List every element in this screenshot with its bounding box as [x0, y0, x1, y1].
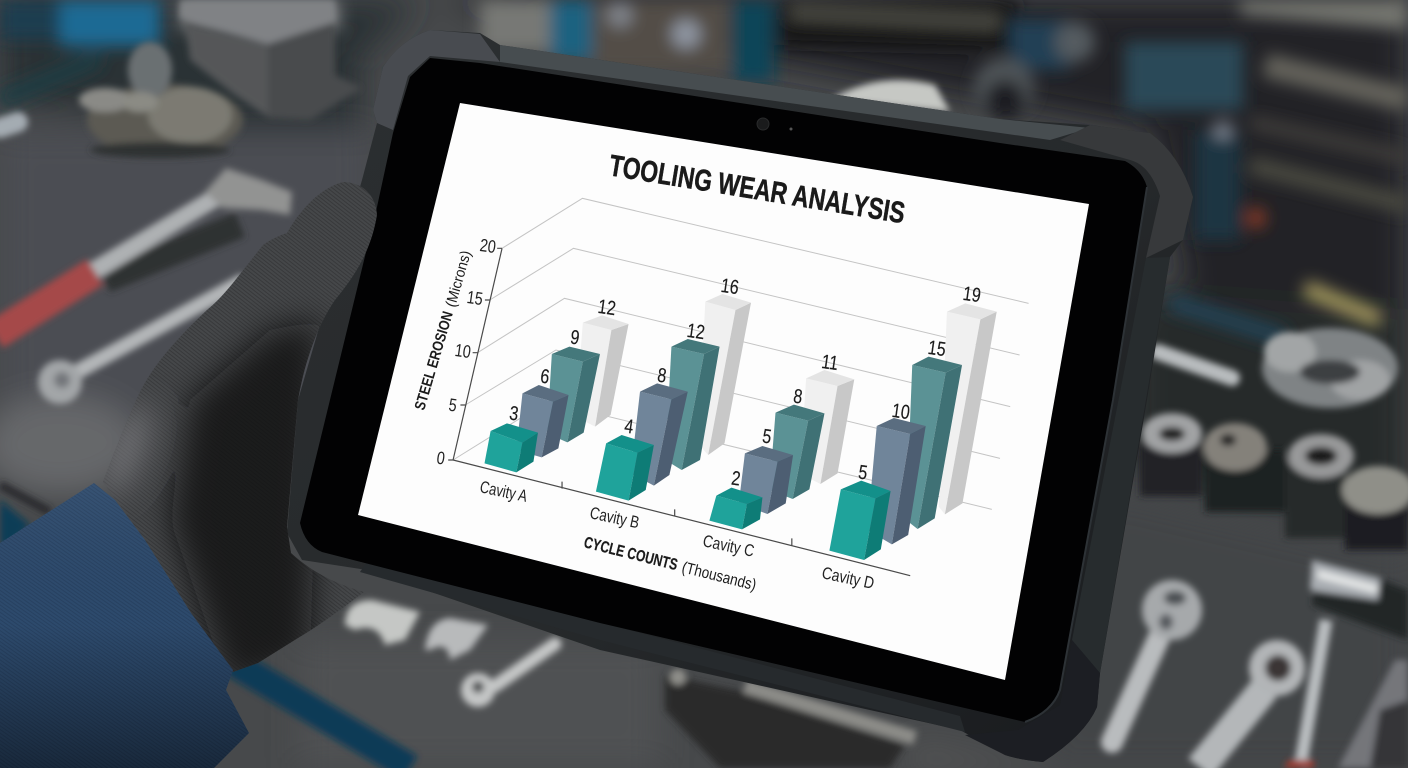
value labels: 6 [539, 365, 551, 388]
value labels: 10 [891, 399, 911, 424]
value labels: 15 [927, 336, 947, 361]
x axis category labels: Cavity A [478, 477, 530, 506]
x axis title [582, 534, 758, 594]
x axis category labels: Cavity B [588, 503, 641, 532]
y axis tick labels: 20 [478, 236, 497, 257]
tablet: rugged case [287, 30, 1193, 762]
value labels: 11 [820, 350, 840, 375]
gloved hand holding tablet [0, 170, 390, 768]
camera [757, 118, 792, 130]
y axis tick labels: 15 [465, 288, 484, 309]
corner bumper bottom right [965, 640, 1100, 762]
bars: Cavity C [709, 370, 854, 529]
value labels: 2 [730, 467, 742, 490]
y axis title: STEEL EROSION [412, 310, 457, 412]
x axis category labels: Cavity D [820, 563, 876, 593]
black bezel [300, 58, 1147, 722]
screen: white chart panel [358, 103, 1089, 680]
y axis title [412, 249, 475, 412]
y axis tick labels [435, 236, 497, 469]
tablet top rail highlight [500, 45, 1090, 140]
right rail [1072, 257, 1170, 673]
y axis title: (Microns) [443, 249, 475, 309]
3D bar chart [412, 198, 1029, 594]
value labels: 9 [569, 326, 581, 349]
bottom rail [360, 562, 965, 732]
bars: Cavity A [484, 315, 629, 472]
corner bumper top left [373, 30, 500, 130]
x axis title: CYCLE COUNTS [582, 534, 680, 574]
y axis tick labels: 5 [447, 395, 458, 416]
value labels: 12 [597, 295, 617, 320]
x axis category labels [478, 477, 876, 593]
value labels: 16 [720, 274, 740, 299]
value labels: 8 [656, 364, 668, 387]
grid lines and axes [448, 198, 1029, 576]
y axis tick labels: 10 [453, 341, 472, 362]
x axis category labels: Cavity C [701, 531, 756, 561]
value labels: 4 [623, 415, 635, 438]
jacket sleeve [0, 483, 249, 768]
value labels: 19 [962, 282, 982, 307]
tablet outer body [287, 30, 1193, 762]
value labels: 5 [761, 425, 773, 448]
value labels: 5 [857, 461, 869, 484]
value labels: 12 [686, 319, 706, 344]
bars: Cavity D [829, 303, 997, 560]
value labels [508, 274, 982, 490]
x axis title: (Thousands) [680, 559, 758, 594]
corner bumper top right [1060, 125, 1193, 258]
bars: Cavity B [596, 294, 751, 501]
value labels: 8 [792, 385, 804, 408]
glove [104, 182, 377, 672]
bezel edge highlight [1025, 187, 1147, 722]
value labels: 3 [508, 402, 520, 425]
title: TOOLING WEAR ANALYSIS [607, 149, 907, 230]
y axis tick labels: 0 [435, 448, 446, 469]
